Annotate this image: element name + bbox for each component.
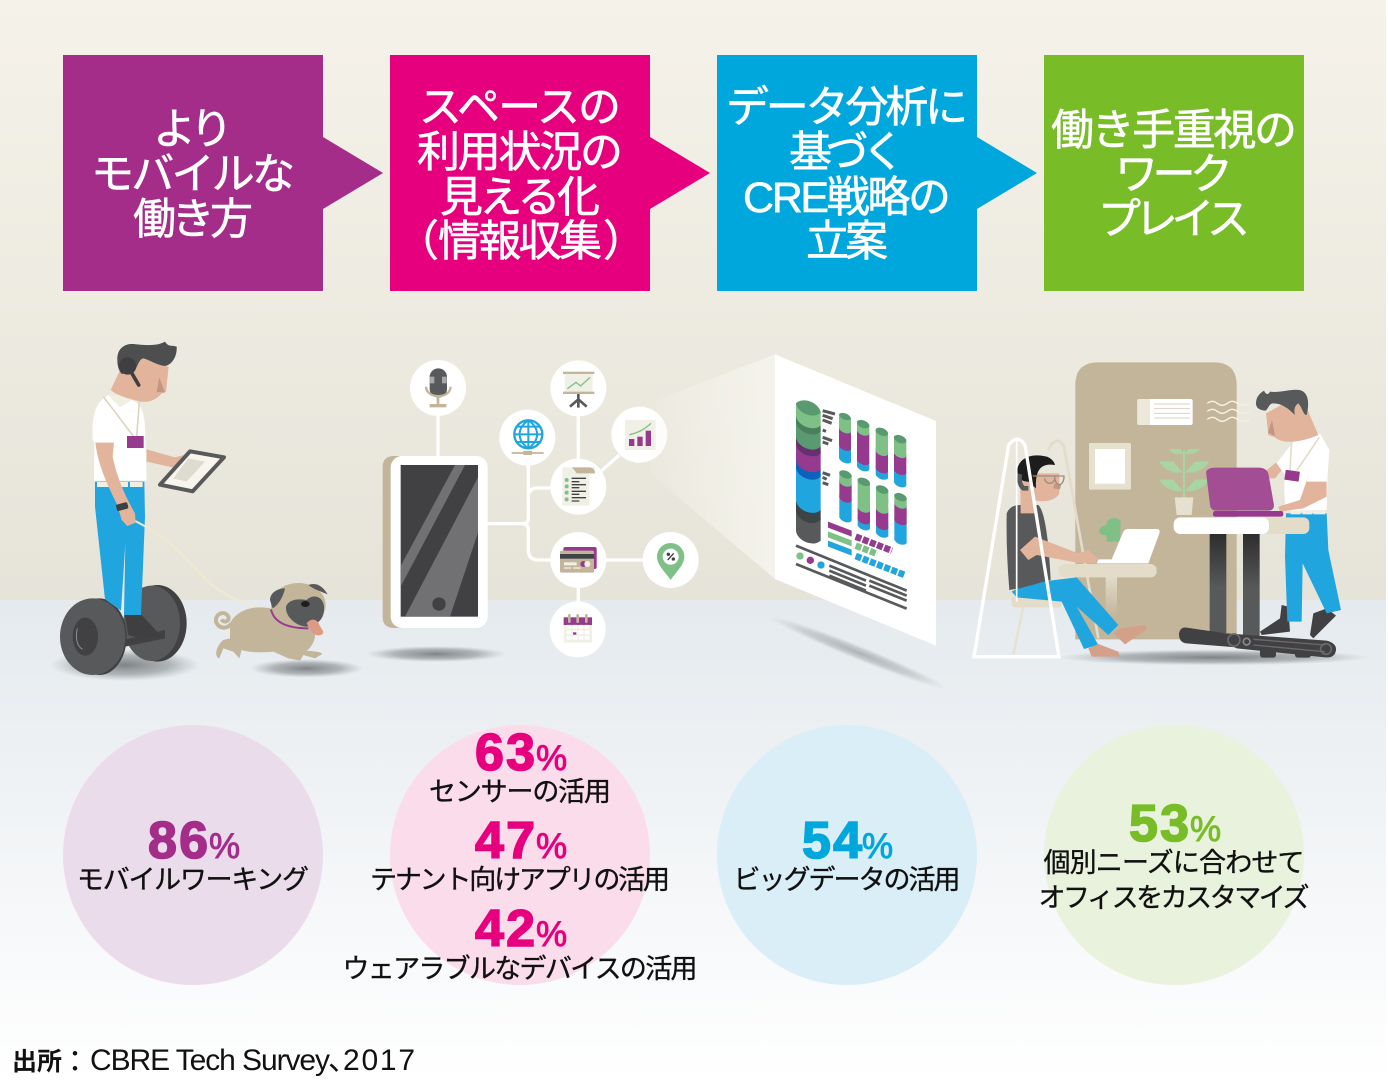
step 3: data analysis CRE strategy box: データ分析に [726,84,968,132]
result circle: sensors, tenant apps, wearables: 47 [475,812,535,870]
step 4: worker-centric workplace box: ワーク [1115,151,1233,199]
standing desk with purple laptop [1174,468,1309,534]
icon: smartphone [383,456,488,628]
icon: document list [550,459,606,515]
icon: globe [499,410,555,466]
step 2: space utilisation box: 利用状況の [417,129,623,177]
standing desk legs [1210,533,1226,633]
icon: credit cards [550,532,606,588]
step 4: worker-centric workplace box [1044,55,1304,291]
result circle: mobile working: 86 [148,812,208,870]
icon: microphone [410,360,466,416]
source note: 2017 [343,1044,415,1077]
source note: 出所 [12,1048,62,1076]
icon: calendar [550,601,606,657]
illustration: man on segway with tablet and pug [50,342,363,681]
icon: presentation chart [550,360,606,416]
step 3: data analysis CRE strategy box: CRE戦略の [743,174,951,222]
result circle: sensors, tenant apps, wearables [342,724,698,985]
result circle: personalised offices: 個別ニーズに合わせて [1044,848,1304,878]
white frame chair [974,439,1059,657]
result circle: mobile working: % [209,827,240,866]
standing man [1256,390,1341,638]
background floor [0,600,1386,1081]
step 1: mobile working box: より [153,106,233,154]
large stacked cylinder [796,400,821,544]
result circle: personalised offices [1038,725,1310,985]
result circle: big data: 54 [802,812,862,870]
result circle: personalised offices: 53 [1129,795,1189,853]
illustration: projected data dashboard [650,354,951,696]
treadmill [1179,628,1336,658]
connector lines [438,407,647,603]
source note: 、 [328,1044,358,1077]
result circle: sensors, tenant apps, wearables: テナント向けアプリの活用 [370,865,670,895]
step 1: mobile working box: 働き方 [133,196,253,244]
dashboard text lines [796,411,907,609]
source note: ： [60,1046,90,1079]
step 3: data analysis CRE strategy box: 基づく [789,129,905,177]
result circle: sensors, tenant apps, wearables: % [536,827,567,866]
result circle: sensors, tenant apps, wearables: % [536,739,567,778]
icon: bar chart [611,407,667,463]
icon: location pin [643,532,699,588]
step 2: space utilisation box: ） [603,218,646,266]
chair and back arches [1013,602,1062,655]
small stacked cylinders [839,413,907,545]
illustration: smartphone connected to data source icons [366,360,699,662]
result circle: sensors, tenant apps, wearables: % [536,915,567,954]
step 2: space utilisation box: 見える化 [440,174,600,222]
seated desk [1106,577,1117,617]
step 4: worker-centric workplace box: 働き手重視の [1051,107,1297,155]
result circle: mobile working: モバイルワーキング [77,865,309,895]
seated man [1007,455,1147,657]
result circle: big data [717,725,977,985]
result circle: sensors, tenant apps, wearables: ウェアラブルなデバイスの活用 [342,954,698,984]
result circle: sensors, tenant apps, wearables: センサーの活用 [429,777,611,807]
step 3: data analysis CRE strategy box: 立案 [806,218,888,266]
dashboard legend bars and squares [796,522,906,575]
air conditioner [1137,399,1193,425]
step 2: space utilisation box: スペースの [419,84,621,132]
step 2: space utilisation box: （ [396,218,439,266]
result circle: personalised offices: オフィスをカスタマイズ [1038,883,1310,913]
result circle: mobile working [63,725,323,985]
background wall [0,0,1386,600]
result circle: personalised offices: % [1190,810,1221,849]
result circle: big data: ビッグデータの活用 [734,865,960,895]
source note: CBRE Tech Survey [90,1044,330,1077]
step 2: space utilisation box: 情報収集 [438,218,602,266]
result circle: big data: % [862,827,893,866]
illustration: workplace with seated worker and treadmill desk [974,362,1370,665]
result circle: sensors, tenant apps, wearables: 63 [475,724,535,782]
result circle: sensors, tenant apps, wearables: 42 [475,900,535,958]
step 3: data analysis CRE strategy box [717,55,1037,291]
step 1: mobile working box [63,55,383,291]
step 1: mobile working box: モバイルな [91,151,295,199]
step 4: worker-centric workplace box: プレイス [1098,196,1250,244]
plant [1159,449,1209,515]
step 2: space utilisation box [390,55,710,291]
